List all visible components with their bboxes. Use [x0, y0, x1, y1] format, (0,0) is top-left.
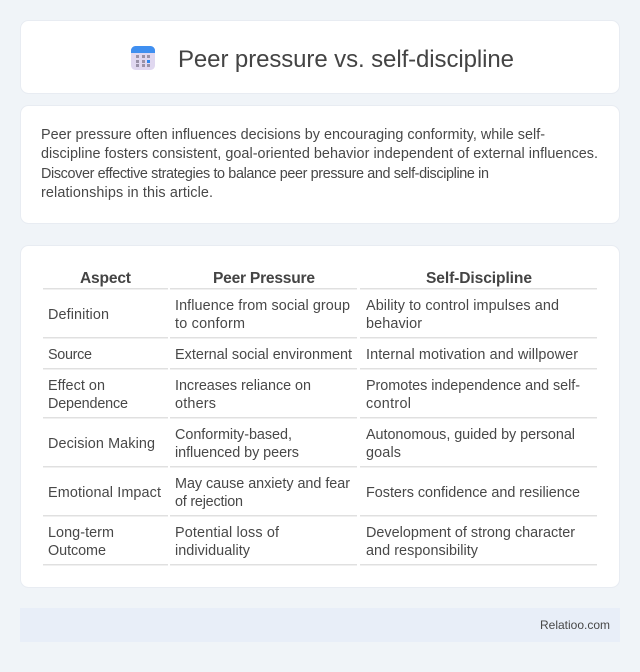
row: definition: Definition: [48, 307, 109, 323]
row: effect on dependence: Promotes independence and self-: [366, 378, 580, 394]
row: decision making: Autonomous, guided by personal: [366, 427, 575, 443]
panel: intro: [20, 106, 620, 224]
row: emotional impact: [48, 476, 580, 510]
row: long-term outcome: Potential loss of: [175, 525, 280, 541]
row: source: [48, 347, 578, 363]
footer: Relatioo.com: [540, 618, 610, 632]
row: effect on dependence: Dependence: [48, 396, 128, 412]
row: long-term outcome: individuality: [175, 543, 251, 559]
row: effect on dependence: control: [366, 396, 411, 412]
row: long-term outcome: Development of strong character: [366, 525, 575, 541]
title: Peer pressure vs. self-discipline: [178, 46, 514, 73]
row: definition: to conform: [175, 316, 245, 332]
icon: calendar: [131, 46, 155, 70]
table header: Aspect: [80, 270, 131, 287]
row: emotional impact: of rejection: [175, 494, 243, 510]
row: definition: Influence from social group: [175, 298, 350, 314]
row: definition: [48, 298, 559, 332]
row: emotional impact: Emotional Impact: [48, 485, 161, 501]
row: long-term outcome: [48, 525, 575, 559]
row: long-term outcome: Long-term: [48, 525, 114, 541]
row: long-term outcome: Outcome: [48, 543, 106, 559]
row: source: Internal motivation and willpower: [366, 347, 578, 363]
row: emotional impact: May cause anxiety and fear: [175, 476, 350, 492]
intro text: relationships in this article.: [41, 185, 213, 201]
row: decision making: influenced by peers: [175, 445, 299, 461]
row: source: Source: [48, 347, 92, 363]
row: effect on dependence: [48, 378, 580, 412]
row: effect on dependence: Increases reliance on: [175, 378, 311, 394]
row: effect on dependence: others: [175, 396, 216, 412]
row: emotional impact: Fosters confidence and resilience: [366, 485, 580, 501]
intro text: Discover effective strategies to balance peer pressure and self-discipline in: [41, 166, 489, 182]
table header: [80, 270, 532, 287]
intro text: Peer pressure often influences decisions by encouraging conformity, while self-: [41, 127, 545, 143]
panel: comparison table: [20, 246, 620, 588]
table header: Peer Pressure: [213, 270, 315, 287]
row: long-term outcome: and responsibility: [366, 543, 479, 559]
footer: [20, 608, 620, 642]
intro text: [41, 127, 598, 201]
panel: title card: [20, 20, 620, 94]
row: source: External social environment: [175, 347, 352, 363]
row: decision making: Decision Making: [48, 436, 155, 452]
row: effect on dependence: Effect on: [48, 378, 105, 394]
row: decision making: goals: [366, 445, 401, 461]
intro text: discipline fosters consistent, goal-oriented behavior independent of external influences.: [41, 146, 598, 162]
row: decision making: [48, 427, 575, 461]
table header: Self-Discipline: [426, 270, 532, 287]
row: definition: behavior: [366, 316, 422, 332]
row: definition: Ability to control impulses and: [366, 298, 559, 314]
row: decision making: Conformity-based,: [175, 427, 292, 443]
